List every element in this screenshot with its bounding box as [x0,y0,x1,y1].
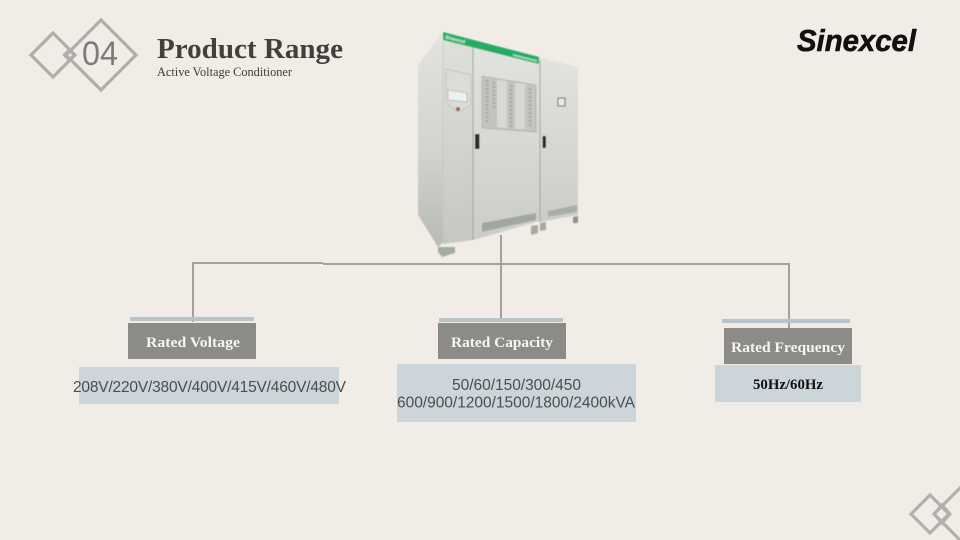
panel: rated voltage: Rated Voltage [146,335,240,351]
icon: section number diamonds [31,20,136,90]
panel: rated capacity [397,318,636,422]
panel: rated capacity: 600/900/1200/1500/1800/2400kVA [397,394,636,412]
panel: rated frequency [715,319,861,402]
brand logo: Sinexcel [797,23,917,58]
cabinet feet [438,247,455,257]
panel: rated voltage [73,317,347,404]
icon: corner diamonds [911,478,960,540]
section number: 04 [82,35,118,73]
panel: rated capacity: Rated Capacity [451,335,554,351]
green brand band [443,32,539,64]
panel: rated voltage: 208V/220V/380V/400V/415V/460V/480V [73,379,347,396]
subtitle: Active Voltage Conditioner [157,65,293,79]
control panel [446,69,471,112]
panel: rated frequency: Rated Frequency [731,340,846,356]
ventilation grilles [482,213,536,232]
door seams and handles [472,47,474,240]
connector lines [193,235,789,328]
title: Product Range [157,34,343,65]
panel: rated capacity: 50/60/150/300/450 [452,377,581,394]
product image: voltage conditioner cabinet: Sinexcel [445,35,466,45]
product image: voltage conditioner cabinet [418,32,578,257]
panel: rated frequency: 50Hz/60Hz [753,377,824,393]
cabinet window [482,76,536,132]
